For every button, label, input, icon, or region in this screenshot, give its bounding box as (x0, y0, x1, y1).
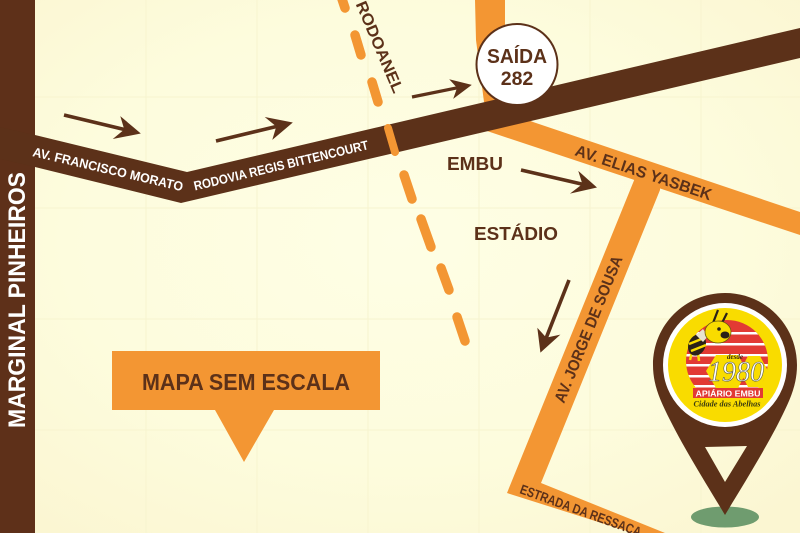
callout: Mapa sem escala (112, 351, 380, 462)
logo tagline: Cidade das Abelhas (694, 398, 761, 408)
logo honeycomb (706, 355, 768, 388)
pin shadow (691, 506, 759, 528)
exit marker: Saída 282: 282 (501, 68, 533, 90)
label: Av. Francisco Morato: AV. FRANCISCO MORATO (31, 144, 185, 194)
label: Rodoanel: RODOANEL (352, 0, 406, 96)
label: Marginal Pinheiros: MARGINAL PINHEIROS (4, 172, 31, 428)
arrow: along Av. Jorge de Sousa (529, 276, 580, 357)
logo stripes (685, 318, 769, 388)
road: Av. Francisco Morato and Rodovia Regis Bittencourt (0, 28, 800, 203)
label: Av. Elias Yasbek: AV. ELIAS YASBEK (573, 143, 714, 204)
road: Av. Elias Yasbek (478, 108, 800, 235)
exit marker: Saída 282: SAÍDA (487, 45, 547, 68)
logo year: 1980 (708, 356, 764, 388)
road: Av. Jorge de Sousa and Estrada da Ressaca (507, 178, 665, 533)
callout: Mapa sem escala: MAPA SEM ESCALA (142, 369, 350, 395)
arrow: along Rodovia Regis Bittencourt (213, 111, 296, 153)
road: Marginal Pinheiros (0, 0, 35, 533)
label: Av. Jorge de Sousa: AV. JORGE DE SOUSA (552, 253, 627, 405)
icon: bee (685, 310, 731, 361)
logo banner: APIÁRIO EMBU (696, 388, 760, 398)
logo year: desde (727, 353, 743, 361)
exit marker: Saída 282 (476, 24, 558, 105)
arrow: along Av. Francisco Morato (61, 103, 144, 145)
map pin with logo (653, 293, 797, 515)
label: Estádio: ESTÁDIO (474, 223, 558, 244)
road: Rodoanel dashed line (342, 0, 465, 341)
label: Rodovia Regis Bittencourt: RODOVIA REGIS BITTENCOURT (192, 137, 370, 193)
road: top orange exit (475, 0, 505, 104)
pin body (653, 293, 797, 515)
label: Embu: EMBU (447, 154, 503, 174)
arrow: along Av. Elias Yasbek (518, 158, 600, 199)
logo disc (663, 303, 787, 427)
arrow: towards exit 282 (410, 75, 474, 107)
